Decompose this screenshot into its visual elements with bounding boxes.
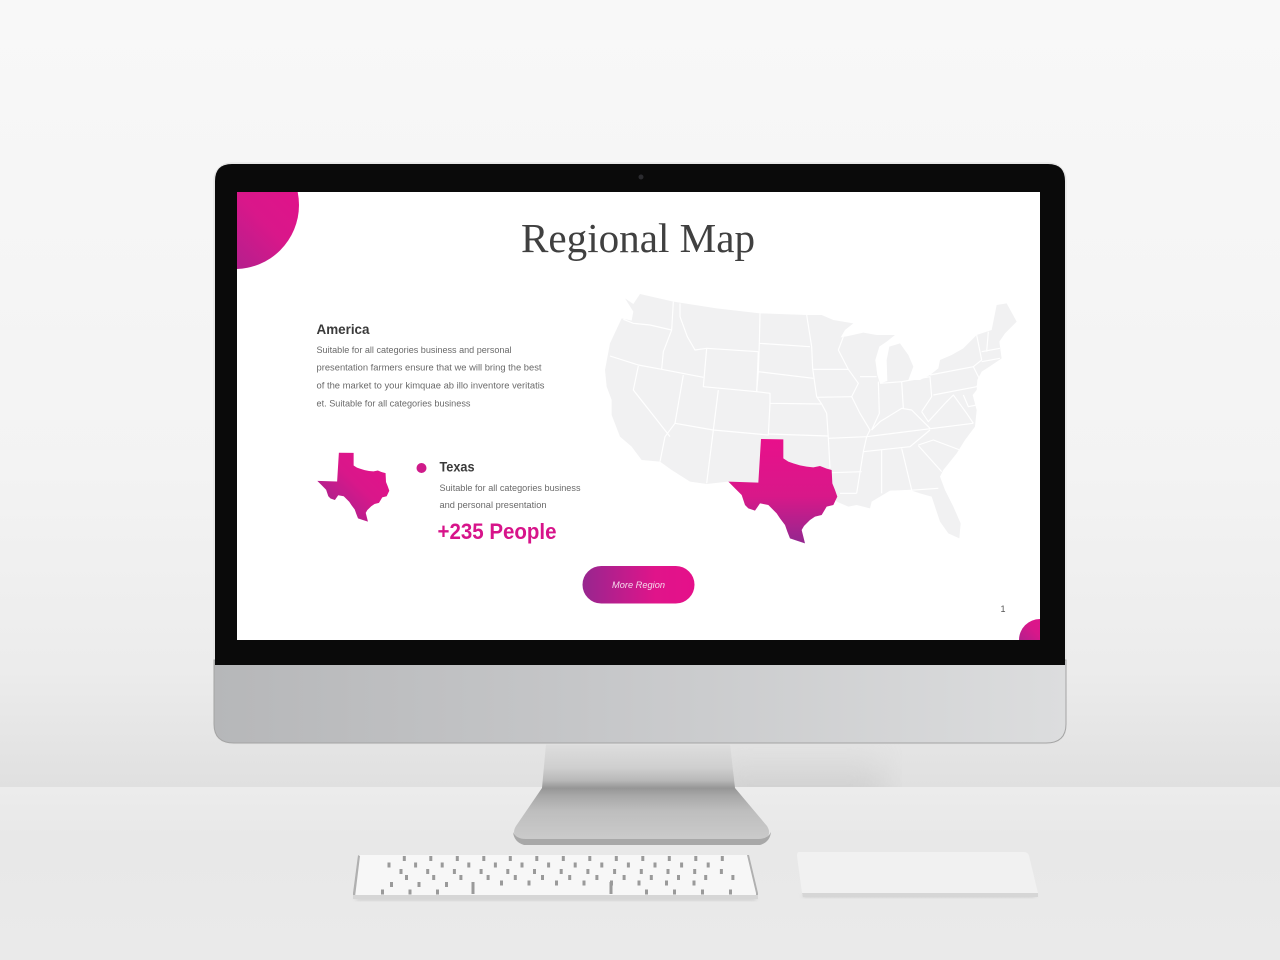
America heading: America xyxy=(316,321,370,337)
desk surface xyxy=(0,787,1280,960)
monitor xyxy=(214,163,1066,744)
keyboard xyxy=(353,855,758,901)
button shape xyxy=(582,566,694,604)
map land xyxy=(605,294,1017,538)
America description: Suitable for all categories business and personal xyxy=(316,345,512,355)
monitor outer edge xyxy=(214,163,1066,744)
trackpad edge xyxy=(802,893,1038,897)
Texas highlight xyxy=(728,439,837,543)
keyboard shadow xyxy=(356,897,756,901)
Texas description: Suitable for all categories business xyxy=(440,483,581,493)
Texas description: and personal presentation xyxy=(440,500,546,510)
stand shadow on wall xyxy=(734,766,882,787)
trackpad shadow xyxy=(803,894,1035,898)
Texas heading: Texas xyxy=(440,458,475,474)
stand foot edge xyxy=(513,832,771,845)
text block: America xyxy=(316,321,545,408)
map state borders xyxy=(610,302,1000,493)
monitor chin xyxy=(214,660,1066,743)
trackpad xyxy=(797,852,1038,898)
text block: Texas xyxy=(438,458,581,544)
decorative circle bottom right xyxy=(1019,619,1040,640)
map: United States xyxy=(605,294,1017,543)
America description: presentation farmers ensure that we will bring the best xyxy=(316,362,542,372)
America description: et. Suitable for all categories business xyxy=(316,398,471,408)
title: Regional Map xyxy=(521,215,755,261)
screen xyxy=(237,192,1040,640)
monitor stand xyxy=(513,744,771,845)
bullet dot xyxy=(416,463,426,473)
keyboard side edges xyxy=(353,855,758,897)
America description xyxy=(316,345,545,408)
keyboard front edge xyxy=(353,895,758,899)
decorative circle top left xyxy=(237,192,299,269)
Texas description xyxy=(440,483,581,510)
stat: people count: +235 People xyxy=(438,519,556,544)
keyboard body xyxy=(353,855,758,899)
camera xyxy=(638,174,644,180)
America description: of the market to your kimquae ab illo inventore veritatis xyxy=(316,380,545,390)
button xyxy=(582,566,694,604)
monitor bezel xyxy=(215,164,1065,665)
trackpad body xyxy=(797,852,1038,896)
stand neck and foot xyxy=(514,744,769,840)
button label: More Region xyxy=(612,580,665,591)
page number: 1 xyxy=(1000,604,1006,614)
key gaps xyxy=(381,858,735,894)
icon: Texas small xyxy=(317,453,389,522)
slide content xyxy=(237,192,1040,640)
